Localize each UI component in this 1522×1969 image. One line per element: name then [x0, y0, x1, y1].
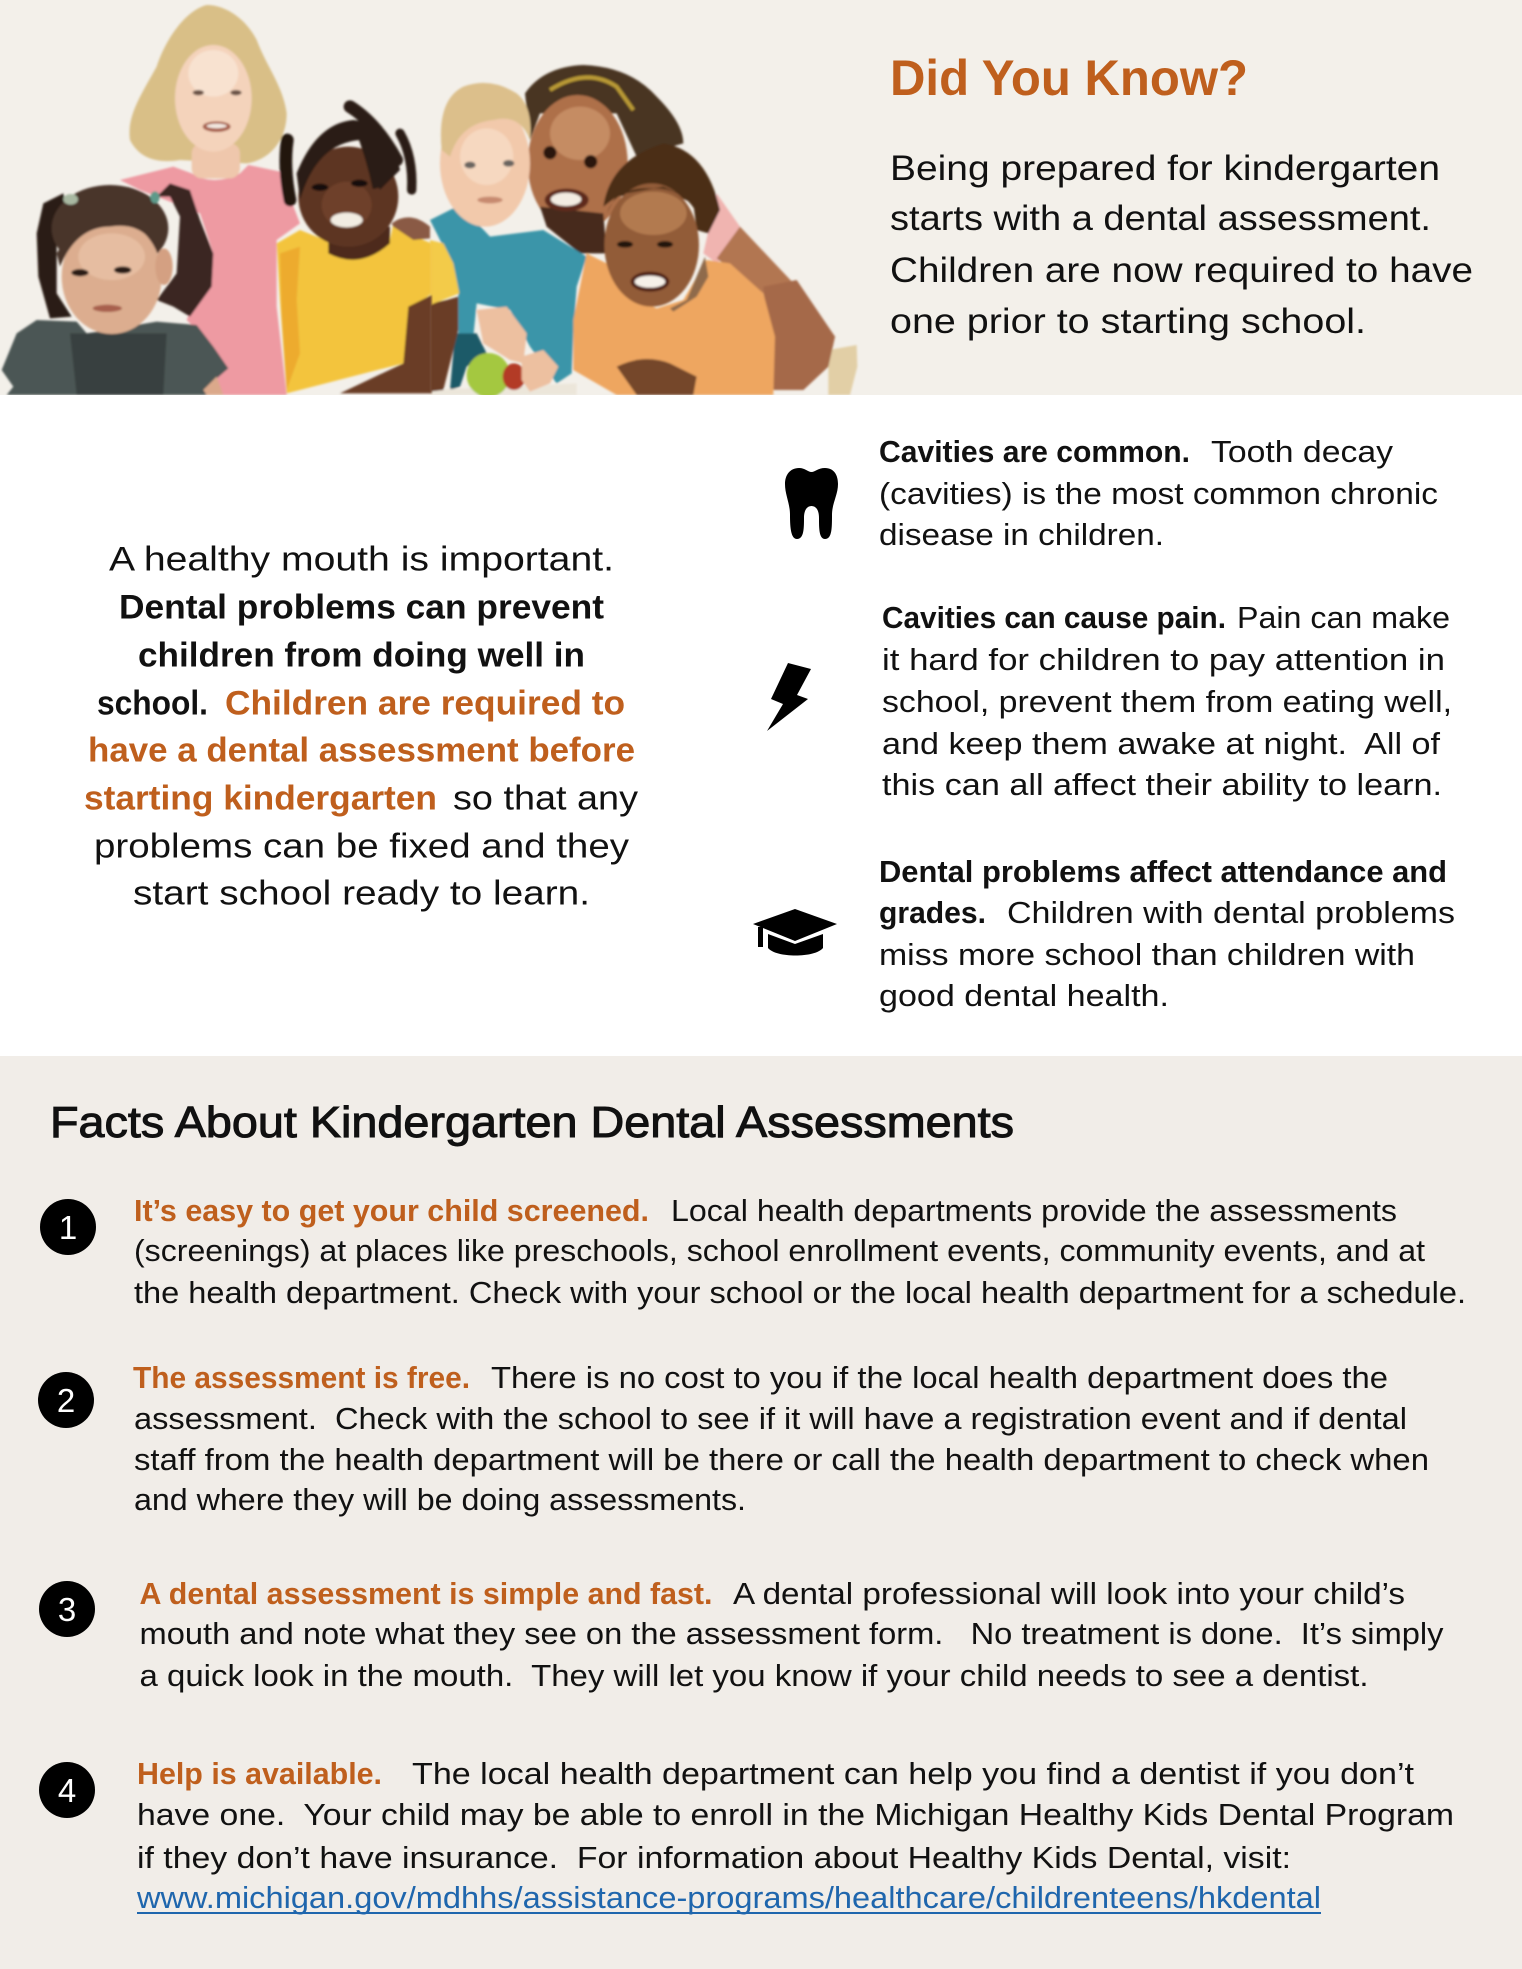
icon: graduation cap — [753, 909, 837, 956]
fact 1: Local health departments provide the assessments — [671, 1194, 1397, 1228]
text block: banner intro: one prior to starting school. — [890, 302, 1366, 341]
text block: attendance and grades: grades. — [879, 896, 986, 930]
link: www.michigan.gov/mdhhs/assistance-programs/healthcare/childrenteens/hkdental — [136, 1881, 1321, 1915]
photo: group of children with a woman — [2, 5, 857, 397]
fact 4: have one. Your child may be able to enroll in the Michigan Healthy Kids Dental Program — [137, 1798, 1454, 1832]
fact 3: A dental professional will look into your child’s — [733, 1577, 1405, 1611]
text block: attendance and grades: miss more school than children with — [879, 938, 1415, 972]
text block: cavities are common: Tooth decay — [1211, 435, 1394, 469]
fact 2: assessment. Check with the school to see if it will have a registration event and if dental — [134, 1402, 1407, 1436]
text block: banner intro: Being prepared for kindergarten — [890, 149, 1440, 188]
fact 1 — [40, 1194, 1466, 1310]
text block: healthy mouth message: start school ready to learn. — [133, 874, 590, 912]
number badge 2 — [38, 1372, 94, 1428]
text block: banner intro — [890, 149, 1473, 341]
number badge 3: 3 — [58, 1591, 76, 1628]
fact 2 — [38, 1361, 1429, 1517]
text block: cavities are common — [879, 435, 1438, 552]
number badge 2: 2 — [57, 1382, 75, 1419]
text block: cavities can cause pain: Pain can make — [1237, 601, 1450, 635]
fact 2: staff from the health department will be there or call the health department to check when — [134, 1443, 1429, 1477]
text block: cavities can cause pain — [882, 601, 1452, 802]
text block: healthy mouth message: starting kindergarten — [84, 780, 437, 818]
fact 4: if they don’t have insurance. For information about Healthy Kids Dental, visit: — [137, 1841, 1291, 1875]
text block: cavities can cause pain: it hard for children to pay attention in — [882, 643, 1445, 677]
fact 4 — [39, 1757, 1454, 1915]
fact 1: the health department. Check with your school or the local health department for a schedule. — [134, 1276, 1466, 1310]
fact 4: The local health department can help you find a dentist if you don’t — [412, 1757, 1415, 1791]
text block: healthy mouth message: children from doing well in — [138, 636, 585, 674]
fact 1: (screenings) at places like preschools, school enrollment events, community events, and at — [134, 1234, 1426, 1268]
text block: banner intro: Children are now required to have — [890, 251, 1473, 290]
text block: attendance and grades: good dental health. — [879, 979, 1169, 1013]
text block: healthy mouth message: so that any — [453, 780, 638, 818]
text block: banner intro: starts with a dental assessment. — [890, 199, 1431, 238]
text block: cavities can cause pain: Cavities can cause pain. — [882, 601, 1226, 635]
icon: tooth — [785, 468, 838, 539]
heading: Did You Know: Did You Know? — [890, 50, 1248, 106]
panel: top banner — [0, 0, 1522, 395]
fact 3 — [39, 1577, 1444, 1693]
text block: healthy mouth message: Dental problems can prevent — [119, 588, 604, 626]
fact 4: Help is available. — [137, 1757, 382, 1791]
text block: cavities can cause pain: school, prevent them from eating well, — [882, 685, 1452, 719]
text block: cavities are common: (cavities) is the most common chronic — [879, 477, 1438, 511]
number badge 4: 4 — [58, 1772, 76, 1809]
text block: healthy mouth message: problems can be fixed and they — [94, 828, 629, 866]
number badge 1: 1 — [59, 1209, 77, 1246]
number badge 3 — [39, 1581, 95, 1637]
number badge 4 — [39, 1762, 95, 1818]
fact 3: A dental assessment is simple and fast. — [140, 1577, 712, 1611]
fact 2: and where they will be doing assessments. — [134, 1483, 746, 1517]
text block: attendance and grades — [879, 855, 1455, 1013]
text block: cavities are common: Cavities are common. — [879, 435, 1190, 469]
text block: healthy mouth message — [84, 540, 638, 912]
fact 3: a quick look in the mouth. They will let you know if your child needs to see a dentist. — [140, 1659, 1368, 1693]
fact 2: The assessment is free. — [133, 1361, 470, 1395]
text block: attendance and grades: Children with dental problems — [1007, 896, 1455, 930]
icon: lightning bolt — [767, 663, 811, 731]
fact 2: There is no cost to you if the local health department does the — [491, 1361, 1388, 1395]
text block: cavities can cause pain: this can all affect their ability to learn. — [882, 768, 1442, 802]
text block: cavities are common: disease in children. — [879, 518, 1164, 552]
text block: healthy mouth message: have a dental assessment before — [88, 732, 635, 770]
fact 3: mouth and note what they see on the assessment form. No treatment is done. It’s simply — [140, 1617, 1444, 1651]
text block: cavities can cause pain: and keep them awake at night. All of — [882, 727, 1441, 761]
text block: healthy mouth message: A healthy mouth is important. — [109, 540, 614, 578]
heading: facts: Facts About Kindergarten Dental Assessments — [50, 1098, 1014, 1147]
text block: attendance and grades: Dental problems affect attendance and — [879, 855, 1447, 889]
panel: facts background — [0, 1056, 1522, 1969]
text block: healthy mouth message: Children are required to — [225, 684, 625, 722]
fact 1: It’s easy to get your child screened. — [134, 1194, 649, 1228]
text block: healthy mouth message: school. — [97, 684, 208, 722]
number badge 1 — [40, 1199, 96, 1255]
